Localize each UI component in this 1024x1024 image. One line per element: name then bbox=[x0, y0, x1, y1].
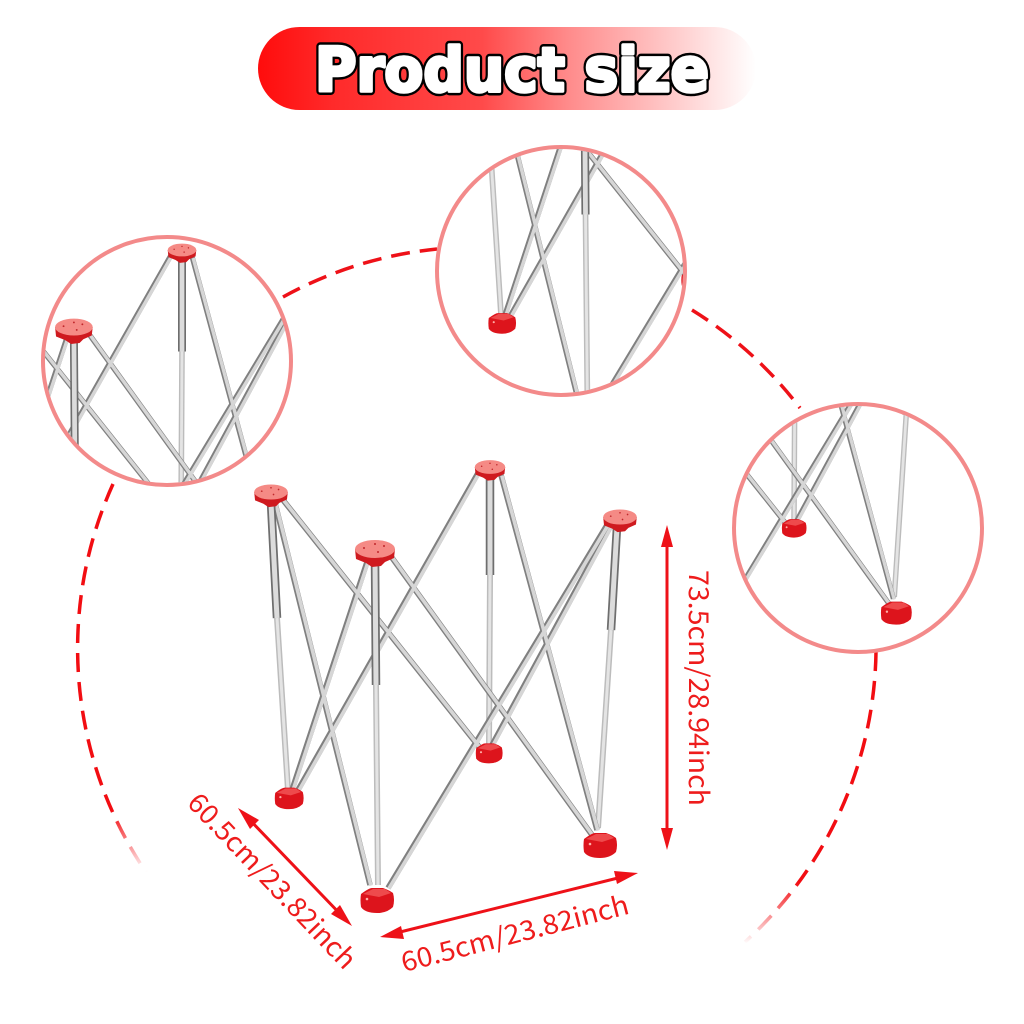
title text: Product size bbox=[315, 35, 709, 106]
depth arrow bbox=[238, 808, 352, 926]
dashed connector ring bbox=[76, 247, 878, 942]
width label: 60.5cm/23.82inch bbox=[396, 883, 633, 980]
height arrow bbox=[661, 525, 673, 850]
zoom circle: top legs, left bbox=[41, 235, 293, 487]
height label: 73.5cm/28.94inch bbox=[681, 570, 720, 806]
title text: Product size bbox=[315, 35, 709, 106]
dimension arrows and labels bbox=[180, 525, 720, 980]
width arrow bbox=[380, 871, 638, 939]
product stand: folding frame bbox=[254, 460, 637, 913]
zoom circle: top centre bbox=[435, 145, 687, 397]
zoom circle: feet, right bbox=[732, 402, 984, 654]
title banner bbox=[258, 27, 756, 110]
depth label: 60.5cm/23.82inch bbox=[180, 783, 367, 976]
